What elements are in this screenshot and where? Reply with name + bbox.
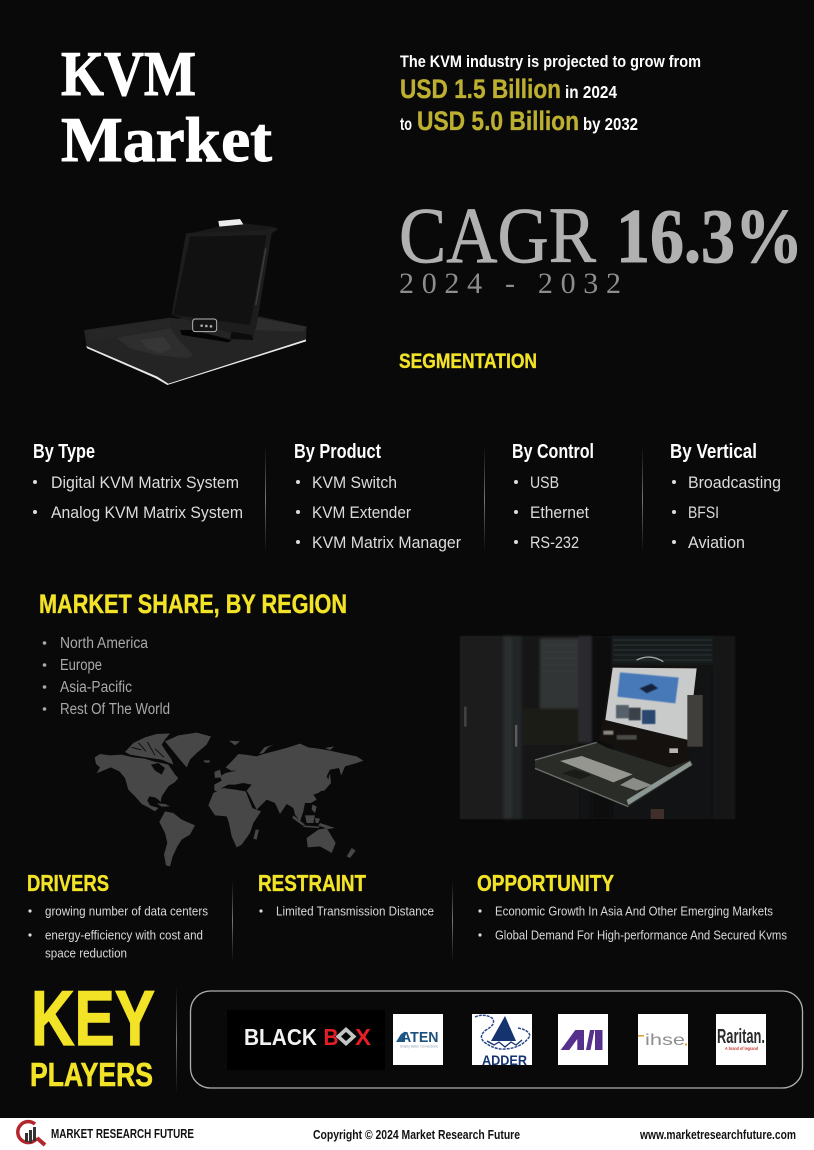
logo: Adder	[472, 1014, 532, 1068]
logo: ATEN: Simply Better Connections	[400, 1044, 438, 1048]
title	[61, 38, 273, 175]
section: drivers: space reduction	[45, 946, 127, 960]
logo: Black Box: B	[324, 1024, 338, 1050]
section: drivers	[27, 870, 208, 960]
section: opportunity: OPPORTUNITY	[477, 870, 614, 896]
logo: ATEN	[393, 1014, 443, 1065]
section: drivers: DRIVERS	[27, 870, 109, 896]
icon: Market Research Future logo	[18, 1122, 45, 1145]
footer bar: MARKET RESEARCH FUTURE	[51, 1126, 194, 1141]
region list: Europe	[60, 657, 102, 674]
logo: AVI	[558, 1014, 608, 1065]
title: Market	[61, 104, 273, 175]
segment: by vertical: Broadcasting	[688, 474, 781, 492]
CAGR figure	[399, 193, 803, 300]
heading: segmentation: SEGMENTATION	[399, 349, 537, 373]
headline: market size projection: in 2024	[565, 82, 617, 102]
section: opportunity: Economic Growth In Asia And Other Emerging Markets	[495, 904, 773, 918]
title: KVM	[61, 38, 196, 109]
segment: by type: Digital KVM Matrix System	[51, 474, 239, 492]
segment: by vertical: By Vertical	[670, 441, 757, 463]
CAGR figure: 2024 - 2032	[399, 267, 621, 300]
headline: market size projection: The KVM industry is projected to grow from	[400, 52, 701, 71]
region list: Rest Of The World	[60, 701, 170, 718]
CAGR figure: CAGR	[399, 193, 596, 280]
logo: Raritan	[716, 1014, 766, 1065]
heading: key players	[30, 974, 155, 1093]
segment: by vertical: BFSI	[688, 504, 719, 522]
region list: North America	[60, 635, 148, 652]
logo: ATEN: ATEN	[401, 1030, 438, 1046]
logo: Raritan: Raritan.	[717, 1026, 765, 1048]
segment: by vertical	[670, 441, 781, 552]
logo: Raritan: A brand of legrand	[725, 1046, 758, 1051]
heading: key players: PLAYERS	[30, 1056, 153, 1093]
segment dividers	[265, 445, 643, 553]
section: drivers: growing number of data centers	[45, 904, 208, 918]
logo: ihse	[638, 1014, 688, 1065]
headline: market size projection: USD 5.0 Billion	[417, 106, 579, 136]
section: restraint: Limited Transmission Distance	[276, 904, 434, 918]
section: restraint: RESTRAINT	[258, 870, 367, 896]
region list: Asia-Pacific	[60, 679, 132, 696]
segment: by type	[33, 441, 243, 522]
icon: KVM console product image	[84, 219, 307, 385]
headline: market size projection	[400, 52, 701, 136]
heading: market share by region: MARKET SHARE, BY REGION	[39, 589, 347, 619]
segment: by product: KVM Matrix Manager	[312, 534, 461, 552]
segment: by control: Ethernet	[530, 504, 589, 522]
segment: by type: Analog KVM Matrix System	[51, 504, 243, 522]
region list	[43, 635, 170, 718]
segment: by control: By Control	[512, 441, 594, 463]
bottom dividers	[176, 880, 453, 1094]
segment: by product	[294, 441, 461, 552]
segment: by type: By Type	[33, 441, 95, 463]
panel: key player logos	[190, 991, 802, 1088]
headline: market size projection: by 2032	[583, 114, 638, 134]
segment: by vertical: Aviation	[688, 534, 745, 552]
segment: by product: By Product	[294, 441, 381, 463]
segment: by product: KVM Switch	[312, 474, 397, 492]
segment: by control: RS-232	[530, 534, 579, 552]
footer bar	[0, 1118, 814, 1150]
segment: by control: USB	[530, 474, 559, 492]
heading: key players: KEY	[31, 974, 155, 1062]
logo: Black Box	[227, 1010, 385, 1070]
section: drivers: energy-efficiency with cost and	[45, 928, 203, 942]
logo: Adder: ADDER	[482, 1052, 527, 1068]
headline: market size projection: to	[400, 114, 412, 134]
section: restraint	[258, 870, 434, 918]
section: opportunity	[477, 870, 787, 942]
photo: rack-mounted KVM console	[460, 636, 735, 819]
logo: ihse: ihse	[645, 1032, 685, 1049]
headline: market size projection: USD 1.5 Billion	[400, 74, 561, 104]
world map	[95, 733, 363, 866]
footer bar: Copyright © 2024 Market Research Future	[313, 1127, 520, 1142]
logo: Black Box: X	[355, 1024, 371, 1050]
section: opportunity: Global Demand For High-performance And Secured Kvms	[495, 928, 787, 942]
logo: Black Box: BLACK	[244, 1024, 317, 1050]
segment: by control	[512, 441, 594, 552]
segment: by product: KVM Extender	[312, 504, 411, 522]
